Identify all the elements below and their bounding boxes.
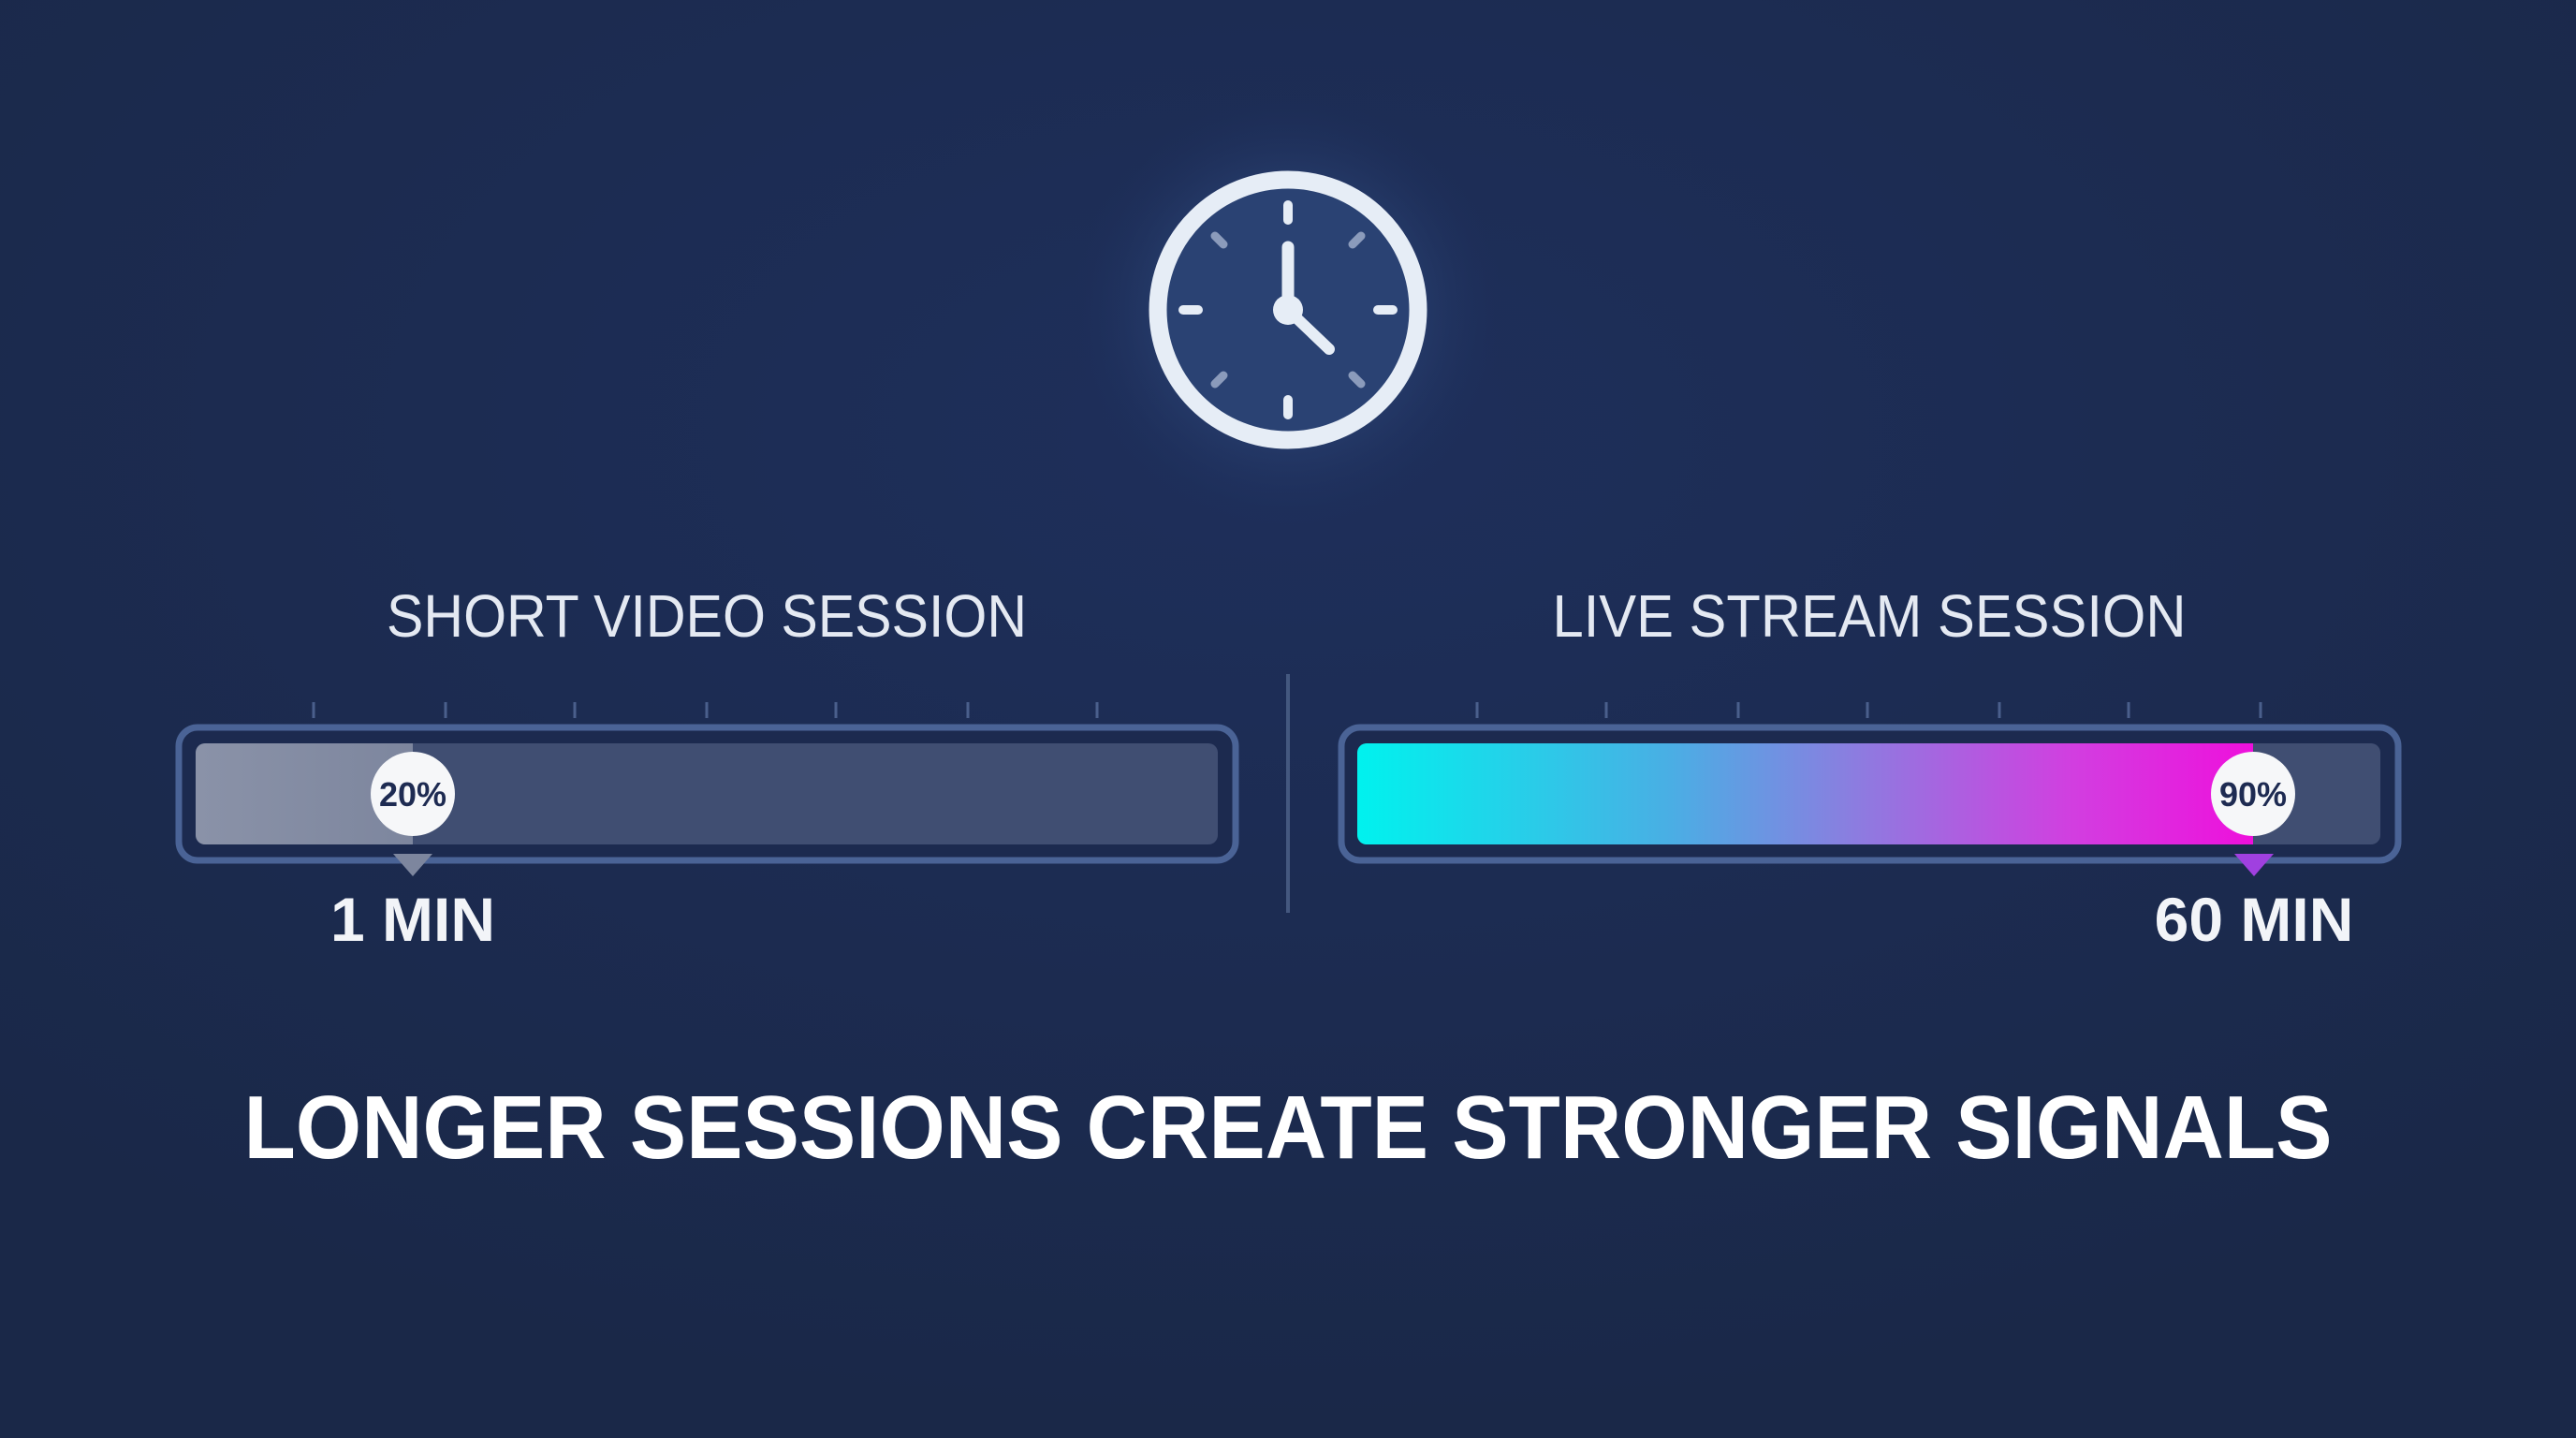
- title: bottom tagline: LONGER SESSIONS CREATE STRONGER SIGNALS: [243, 1078, 2333, 1178]
- divider: [1286, 674, 1290, 913]
- icon: clock: [1073, 95, 1503, 525]
- panel: live stream bar: [1341, 702, 2398, 954]
- bubble: 90%: [2211, 752, 2295, 836]
- panel: short video bar: [179, 702, 1236, 954]
- pointer: live: [2234, 854, 2274, 876]
- heading: short video session: SHORT VIDEO SESSION: [387, 582, 1027, 650]
- label: 60 min: 60 MIN: [2155, 885, 2353, 954]
- pointer: short: [393, 854, 432, 876]
- bubble: 20%: 20%: [379, 775, 446, 814]
- label: 1 min: 1 MIN: [330, 885, 495, 954]
- heading: live stream session: LIVE STREAM SESSION: [1552, 582, 2187, 650]
- bubble: 90%: 90%: [2219, 775, 2287, 814]
- bubble: 20%: [371, 752, 455, 836]
